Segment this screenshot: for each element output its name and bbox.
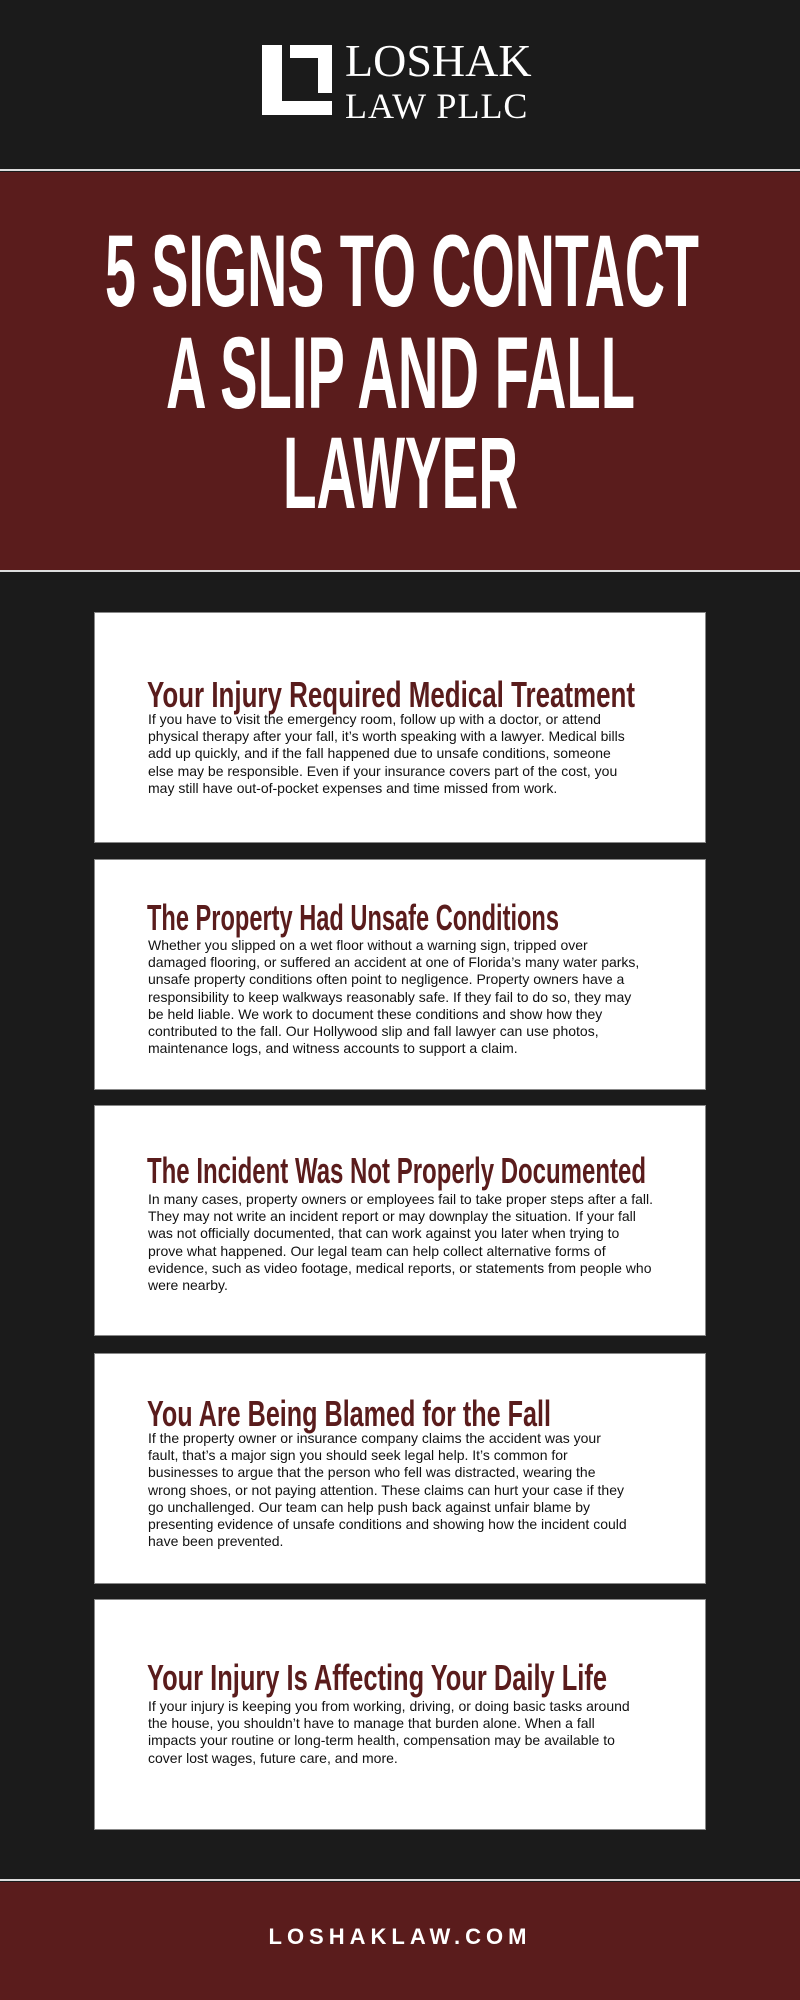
logo text [345, 35, 532, 126]
panel: being blamed [94, 1353, 706, 1584]
text: else may be responsible. Even if your insurance covers part of the cost, you [148, 763, 617, 779]
text: unsafe property conditions often point to negligence. Property owners have a [148, 971, 624, 987]
text: businesses to argue that the person who fell was distracted, wearing the [148, 1464, 595, 1480]
panel: not documented [94, 1105, 706, 1336]
panel: medical treatment [94, 612, 706, 843]
text: maintenance logs, and witness accounts to support a claim. [148, 1040, 518, 1056]
text: physical therapy after your fall, it’s worth speaking with a lawyer. Medical bills [148, 728, 625, 744]
text: may still have out-of-pocket expenses and time missed from work. [148, 780, 557, 796]
text: If you have to visit the emergency room, follow up with a doctor, or attend [148, 711, 601, 727]
text: go unchallenged. Our team can help push back against unfair blame by [148, 1499, 590, 1515]
text: damaged flooring, or suffered an accident at one of Florida’s many water parks, [148, 954, 639, 970]
text: cover lost wages, future care, and more. [148, 1750, 398, 1766]
text [148, 1698, 630, 1766]
logo text: LAW PLLC [345, 86, 528, 126]
footer [0, 1882, 800, 2000]
text: contributed to the fall. Our Hollywood slip and fall lawyer can use photos, [148, 1023, 599, 1039]
text: If your injury is keeping you from working, driving, or doing basic tasks around [148, 1698, 630, 1714]
panel: unsafe conditions [94, 859, 706, 1090]
text: Whether you slipped on a wet floor without a warning sign, tripped over [148, 937, 588, 953]
text: have been prevented. [148, 1533, 283, 1549]
text: was not officially documented, that can work against you later when trying to [148, 1225, 619, 1241]
text: fault, that’s a major sign you should seek legal help. It’s common for [148, 1447, 568, 1463]
title band [0, 172, 800, 570]
text: responsibility to keep walkways reasonably safe. If they fail to do so, they may [148, 989, 631, 1005]
title: LAWYER [283, 416, 518, 530]
text: be held liable. We work to document these conditions and show how they [148, 1006, 602, 1022]
panel: daily life [94, 1599, 706, 1830]
text [148, 937, 639, 1056]
text: evidence, such as video footage, medical reports, or statements from people who [148, 1260, 652, 1276]
text [148, 1430, 627, 1549]
text: They may not write an incident report or may downplay the situation. If your fall [148, 1208, 636, 1224]
text [148, 1191, 653, 1293]
text: If the property owner or insurance company claims the accident was your [148, 1430, 601, 1446]
text: In many cases, property owners or employees fail to take proper steps after a fall. [148, 1191, 653, 1207]
footer url: LOSHAKLAW.COM [268, 1924, 532, 1949]
text: presenting evidence of unsafe conditions and showing how the incident could [148, 1516, 627, 1532]
text: prove what happened. Our legal team can help collect alternative forms of [148, 1243, 606, 1259]
title [105, 214, 699, 530]
header band [0, 0, 800, 170]
logo text: LOSHAK [345, 35, 532, 86]
text: add up quickly, and if the fall happened due to unsafe conditions, someone [148, 745, 611, 761]
text [148, 711, 625, 796]
icon: logo mark [262, 45, 332, 115]
text: wrong shoes, or not paying attention. These claims can hurt your case if they [148, 1482, 624, 1498]
text: impacts your routine or long-term health, compensation may be available to [148, 1732, 615, 1748]
text: were nearby. [148, 1277, 228, 1293]
logo [262, 35, 532, 126]
text: the house, you shouldn’t have to manage that burden alone. When a fall [148, 1715, 595, 1731]
